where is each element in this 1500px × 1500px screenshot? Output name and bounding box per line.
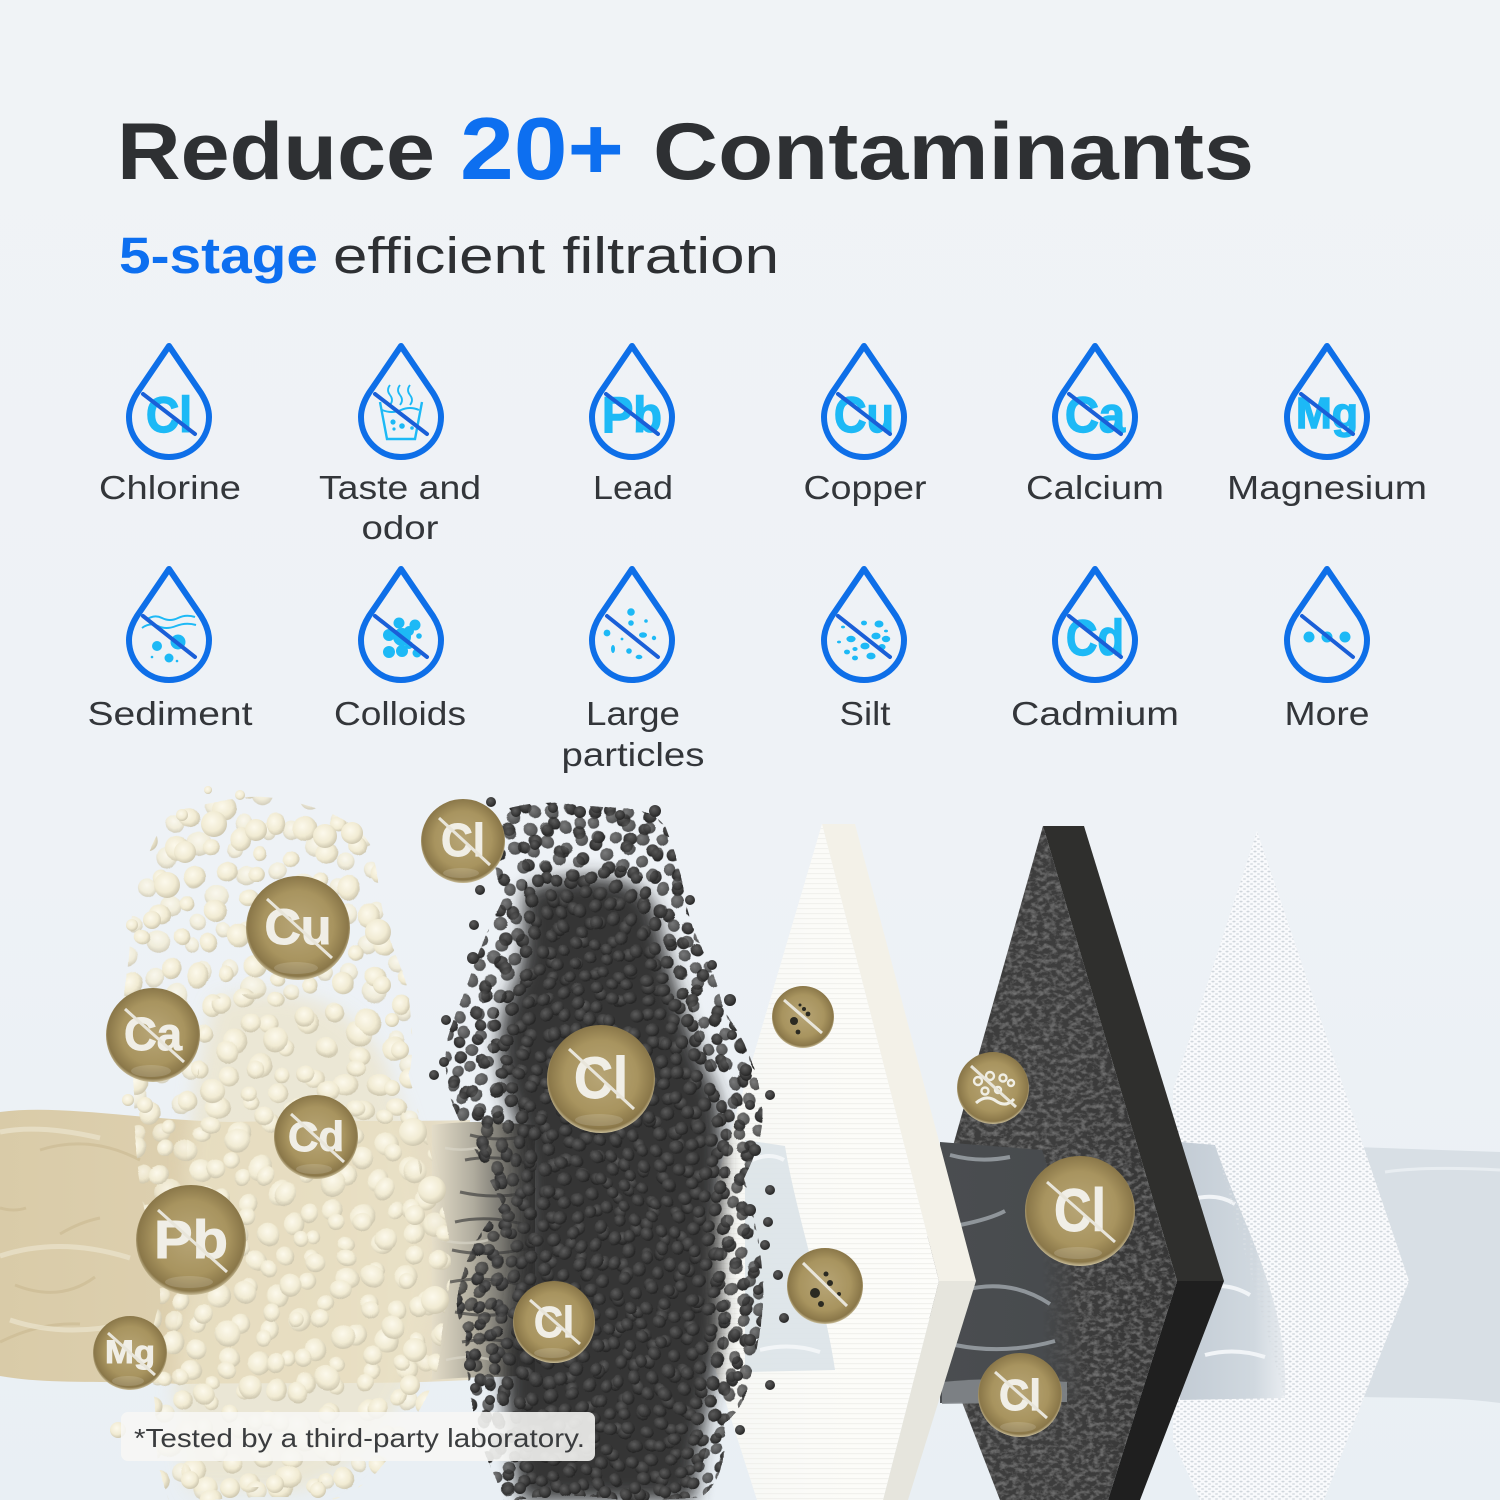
contaminant item: magnesium: [1227, 346, 1427, 506]
orb: Cl large on black sheet: Cl: [1054, 1177, 1106, 1244]
orb: Cl lower centre: [513, 1281, 595, 1363]
contaminant item: lead: Lead: [593, 469, 673, 506]
contaminant item: silt: [824, 569, 904, 732]
orb: Cl large centre: [547, 1025, 655, 1133]
orb: Cl lower on black sheet: Cl: [999, 1371, 1041, 1420]
title: 20+: [460, 99, 624, 198]
orb: Cl lower centre: Cl: [534, 1298, 574, 1347]
contaminant item: magnesium: Mg: [1296, 389, 1358, 438]
contaminant item: silt: Silt: [840, 695, 890, 732]
water between white and black sheets: [940, 1142, 1085, 1404]
orb: Cu: [246, 876, 350, 980]
note: tested by a third-party laboratory: [121, 1412, 595, 1461]
orb: Cl top: Cl: [441, 814, 485, 866]
note: tested by a third-party laboratory: *Tested by a third-party laboratory.: [134, 1423, 585, 1453]
dark water passing into carbon beads: [432, 1122, 535, 1380]
contaminant item: calcium: Calcium: [1026, 469, 1164, 506]
contaminant item: copper: [804, 346, 927, 506]
orb: Cl large on black sheet: [1025, 1156, 1135, 1266]
orb: Cu: Cu: [264, 899, 332, 955]
orb: Ca: [106, 988, 200, 1082]
orb: Cl top: [421, 799, 505, 883]
contaminant item: more: More: [1284, 695, 1370, 732]
filter stage 5: white mesh sheet with clean water: [1173, 831, 1500, 1500]
contaminant item: lead: [592, 346, 673, 506]
stage 1: cream resin beads: [110, 786, 470, 1500]
contaminant item: cadmium: Cd: [1066, 610, 1124, 666]
contaminant item: sediment: Sediment: [88, 695, 252, 732]
contaminant item: copper: Copper: [804, 469, 927, 506]
contaminant item: cadmium: [1011, 569, 1179, 732]
contaminant item: taste and odor: [319, 346, 481, 546]
contaminant item: large particles: [562, 569, 704, 773]
orb: Cl large centre: Cl: [574, 1046, 628, 1111]
contaminant item: chlorine: Cl: [146, 387, 192, 443]
contaminant item: calcium: [1026, 346, 1164, 506]
orb: Cd: [274, 1095, 358, 1179]
subtitle: [119, 227, 779, 284]
subtitle: 5-stage: [119, 227, 318, 284]
title: Reduce: [117, 107, 435, 197]
contaminant item: lead: Pb: [602, 387, 662, 443]
tan contaminated water stream: [0, 1110, 470, 1384]
orb: Mg: [93, 1316, 167, 1390]
orb: Cd: Cd: [288, 1113, 344, 1160]
orb: Pb: [136, 1185, 246, 1295]
filter stage 3: white cotton sheet: [687, 824, 976, 1500]
orb: silt upper: [772, 986, 834, 1048]
contaminant item: calcium: Ca: [1065, 387, 1126, 443]
orb: Cl lower on black sheet: [978, 1353, 1062, 1437]
contaminant item: magnesium: Magnesium: [1227, 469, 1427, 506]
orb: Ca: Ca: [124, 1008, 182, 1060]
contaminant item: large particles: Large: [586, 695, 680, 732]
contaminant item: sediment: [88, 569, 252, 732]
contaminant item: taste and odor: Taste and: [319, 469, 481, 506]
contaminant item: cadmium: Cadmium: [1011, 695, 1179, 732]
contaminant item: more: [1284, 569, 1370, 732]
contaminant item: chlorine: [99, 346, 241, 506]
filter stage 4: black carbon sheet: [915, 826, 1224, 1500]
stage 2: black carbon beads: [429, 790, 789, 1500]
title: [117, 99, 1254, 198]
orb: silt lower: [787, 1248, 863, 1324]
contaminant item: chlorine: Chlorine: [99, 469, 241, 506]
contaminant item: colloids: Colloids: [334, 695, 466, 732]
subtitle: efficient filtration: [333, 227, 779, 284]
title: Contaminants: [653, 107, 1254, 197]
contaminant item: colloids: [334, 569, 466, 732]
orb: Pb: Pb: [154, 1210, 228, 1270]
orb: Mg: Mg: [105, 1334, 155, 1370]
contaminant item: taste and odor: odor: [362, 509, 438, 546]
orb: colloids: [957, 1052, 1029, 1124]
contaminant item: large particles: particles: [562, 736, 704, 773]
contaminant item: copper: Cu: [834, 387, 894, 443]
